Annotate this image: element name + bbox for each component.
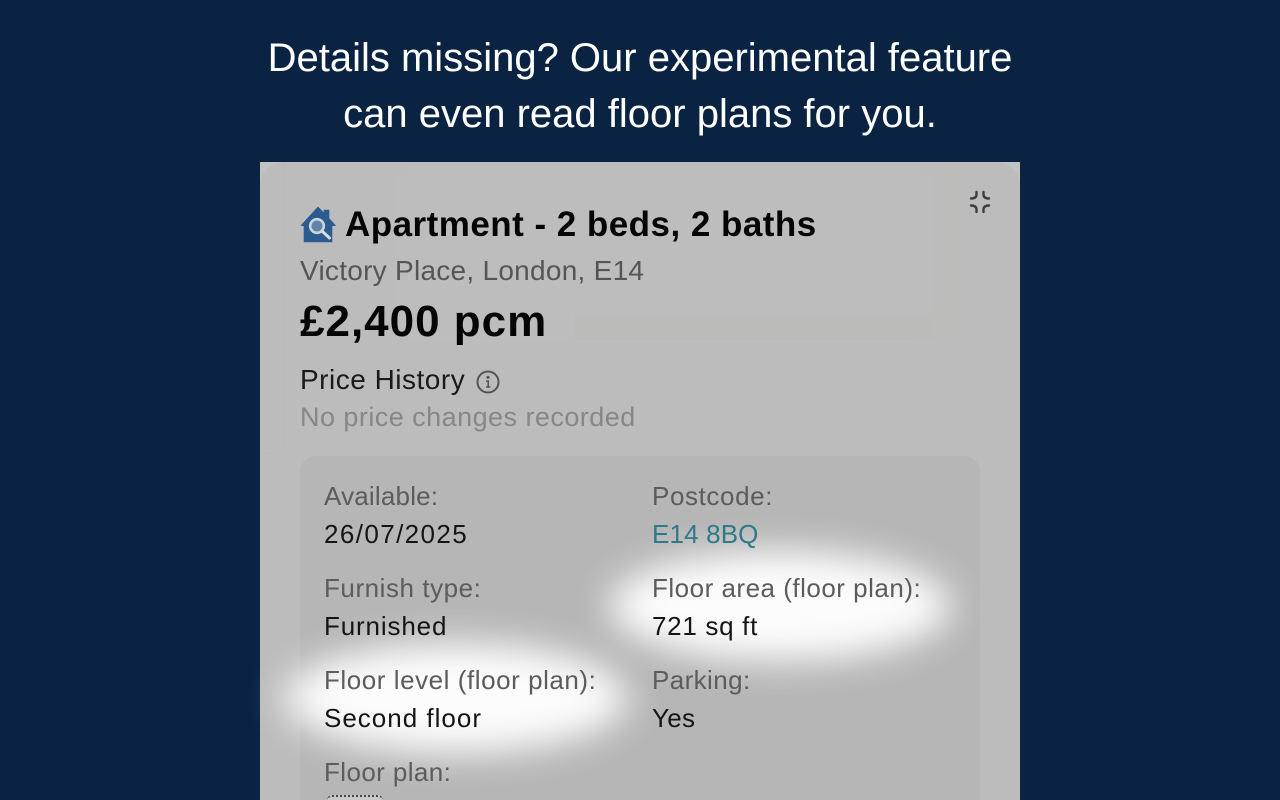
label: Floor level (floor plan): — [324, 665, 596, 695]
value: Yes — [652, 703, 695, 733]
label: Parking: — [652, 665, 751, 695]
icon: info — [476, 370, 500, 394]
floor plan thumbnail — [327, 795, 383, 800]
label: Postcode: — [652, 481, 773, 511]
title — [268, 36, 1012, 136]
icon: house with magnifier — [300, 206, 336, 242]
field: parking — [652, 665, 751, 733]
highlight: floor area — [609, 551, 951, 661]
address: Victory Place, London, E14 — [300, 255, 644, 286]
faded side panel — [260, 162, 284, 454]
price history note: No price changes recorded — [300, 402, 636, 432]
title: can even read floor plans for you. — [343, 92, 937, 136]
price history label: Price History — [300, 364, 465, 395]
faded background page — [394, 166, 934, 342]
faded background strip — [575, 313, 934, 340]
icon: collapse — [970, 190, 990, 214]
field: available — [324, 481, 468, 549]
value: E14 8BQ — [652, 519, 759, 549]
field: floor plan — [324, 757, 451, 800]
faded background column — [934, 166, 962, 340]
highlight: floor level — [284, 643, 628, 753]
title: Details missing? Our experimental feature — [268, 36, 1012, 80]
value: 26/07/2025 — [324, 519, 468, 549]
value: Furnished — [324, 611, 447, 641]
field: furnish type — [324, 573, 481, 641]
label: Furnish type: — [324, 573, 481, 603]
label: Floor plan: — [324, 757, 451, 787]
panel: details — [300, 456, 980, 800]
field: floor level — [324, 665, 596, 733]
heading: property type: Apartment - 2 beds, 2 baths — [345, 205, 817, 244]
field: floor area — [652, 573, 921, 641]
value: 721 sq ft — [652, 611, 758, 641]
label: Available: — [324, 481, 438, 511]
panel: property card — [260, 162, 1020, 800]
field: postcode — [652, 481, 773, 549]
value: Second floor — [324, 703, 482, 733]
price: £2,400 pcm — [300, 297, 547, 346]
label: Floor area (floor plan): — [652, 573, 921, 603]
card surface — [260, 162, 1020, 800]
